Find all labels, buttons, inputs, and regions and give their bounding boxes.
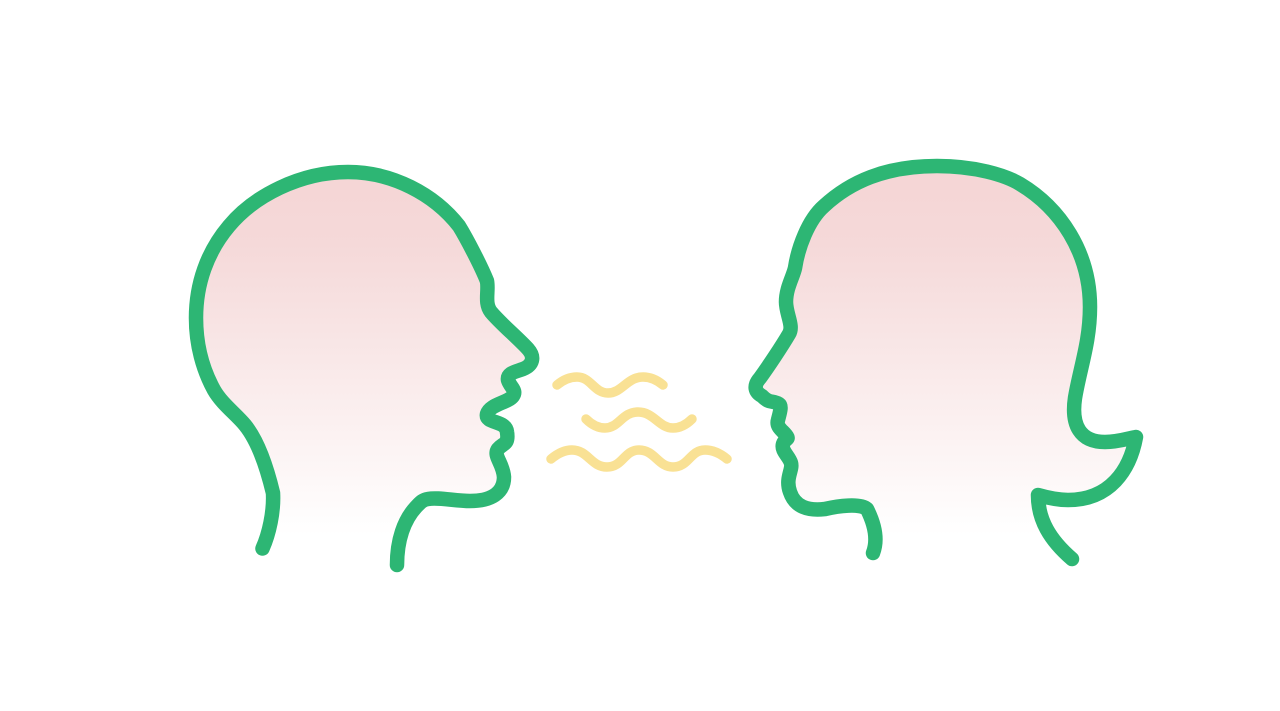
right head profile — [756, 166, 1136, 559]
left head profile — [196, 172, 532, 565]
speech waves — [551, 377, 727, 467]
